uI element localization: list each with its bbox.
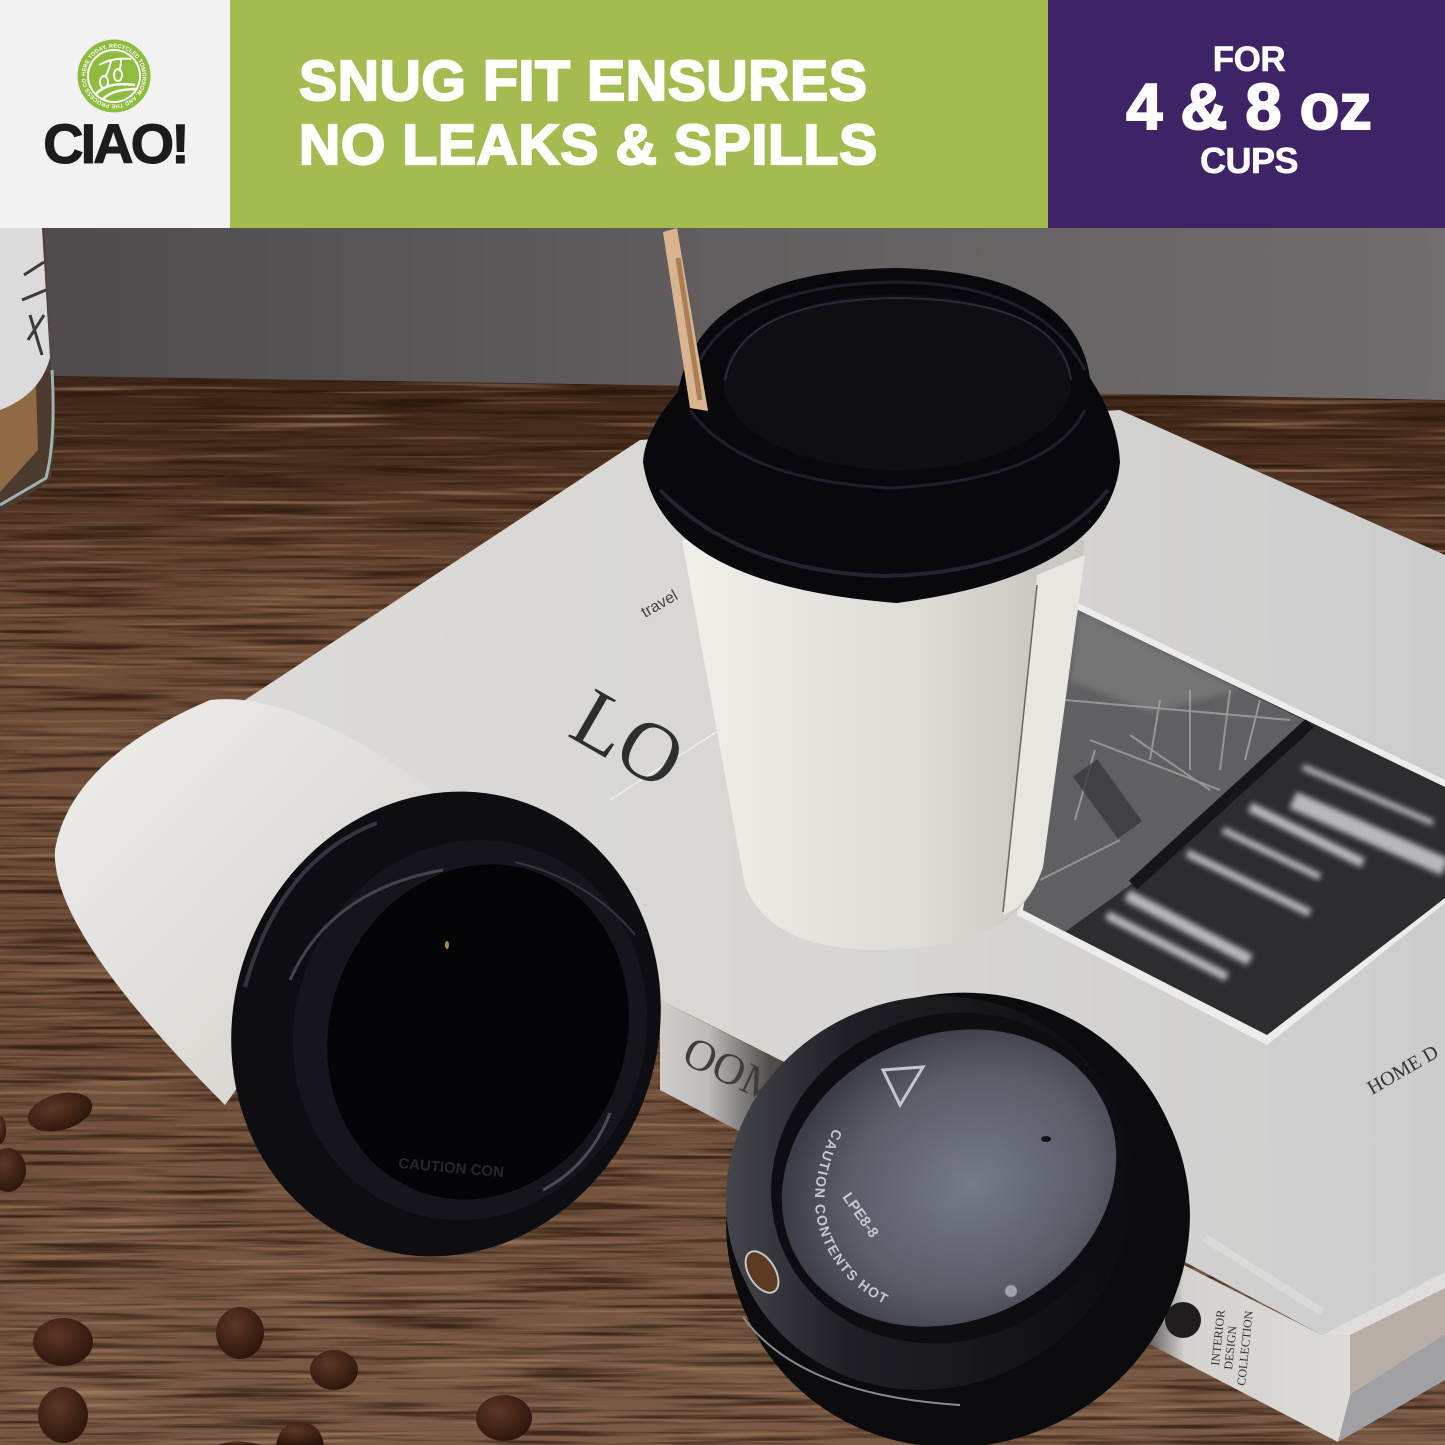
book: travel	[638, 587, 681, 621]
book	[245, 410, 1445, 1442]
book: COLLECTION	[1234, 1310, 1256, 1386]
heading: SNUG FIT ENSURES	[299, 49, 868, 113]
flat lid bottom right: CAUTION CONTENTS HOT	[815, 1130, 889, 1302]
upright cup body	[682, 540, 1085, 950]
book: HOME D	[1364, 1041, 1442, 1099]
heading	[299, 49, 878, 177]
lying cup lid: CAUTION CON	[398, 1155, 505, 1181]
upright cup lid	[643, 268, 1120, 603]
panel: cup sizes	[1048, 0, 1445, 228]
brand name: CIAO!	[43, 112, 187, 175]
book: INTERIOR	[1208, 1309, 1228, 1366]
flat lid bottom right	[726, 992, 1190, 1445]
wall	[0, 228, 1445, 403]
flat lid bottom right: LPE8-8	[839, 1190, 882, 1241]
panel: headline	[230, 0, 1048, 228]
book: LO	[556, 671, 700, 807]
size label: FOR	[1213, 40, 1285, 79]
size label: CUPS	[1200, 140, 1298, 181]
panel: logo	[0, 0, 230, 228]
size label	[1126, 40, 1372, 181]
lying cup body	[55, 699, 445, 1105]
book: DESIGN	[1221, 1325, 1240, 1370]
size label: 4 & 8 oz	[1126, 70, 1372, 143]
heading: NO LEAKS & SPILLS	[299, 113, 878, 177]
jar at left	[0, 228, 55, 515]
lying cup lid	[166, 731, 726, 1317]
table	[0, 375, 1445, 1445]
stirrer	[663, 228, 708, 411]
book: OOM	[676, 1027, 790, 1114]
coffee beans	[0, 1086, 532, 1445]
